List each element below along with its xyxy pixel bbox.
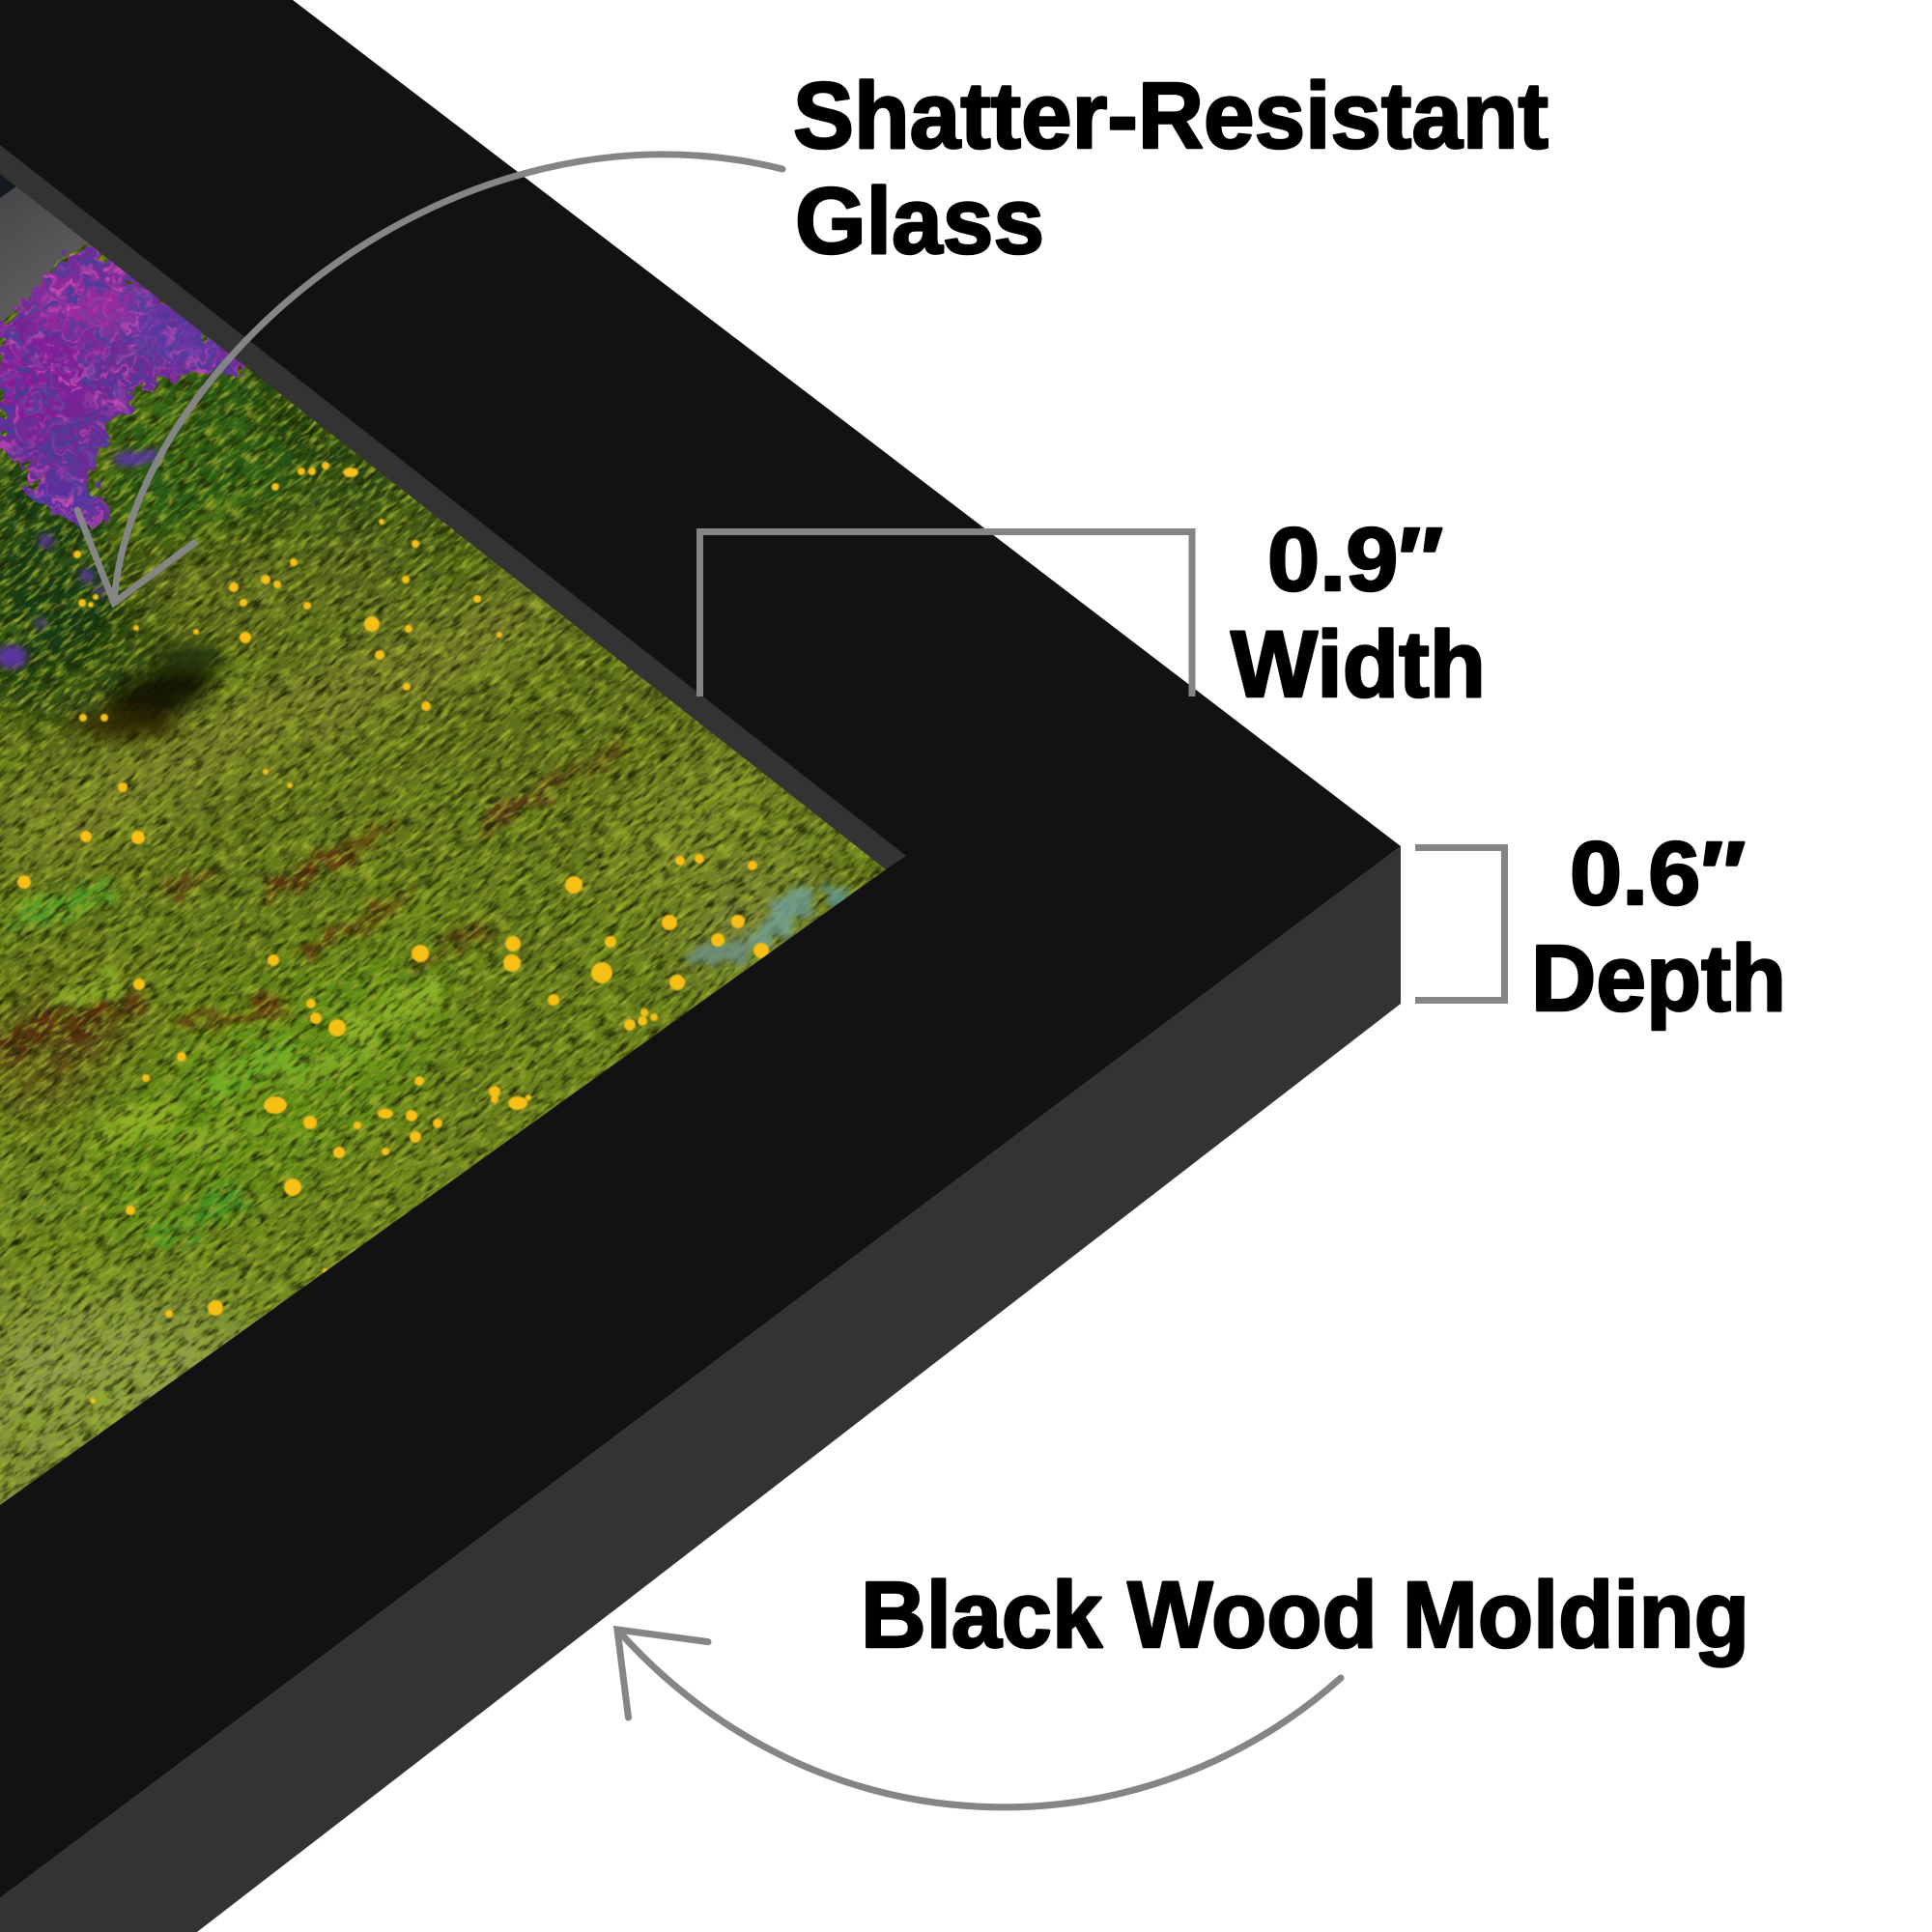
photo: grass texture dark xyxy=(0,244,883,1505)
photo: broad tonal patches xyxy=(0,396,842,1439)
label: Shatter-Resistant Glass: Glass xyxy=(795,168,1044,273)
photo: dark top-left corner xyxy=(0,174,15,198)
label: 0.9 inch width xyxy=(1231,509,1486,717)
photo: reddish brown and bright green streaks xyxy=(0,752,616,1236)
photo: mottled grass tone xyxy=(0,253,871,1475)
photo: grass texture light xyxy=(0,176,886,1505)
photo: grass base xyxy=(0,145,918,1517)
arrow: curved pointer to glass xyxy=(77,155,782,603)
photo: purple lupin flowers xyxy=(0,243,245,528)
label: 0.6 inch depth: 0.6″ xyxy=(1570,823,1746,923)
label: Black Wood Molding: Black Wood Molding xyxy=(861,1562,1749,1667)
label: 0.6 inch depth xyxy=(1531,823,1786,1031)
framed landscape photo xyxy=(0,0,918,1553)
photo: yellow wildflowers xyxy=(17,462,769,1404)
label: Shatter-Resistant Glass xyxy=(793,63,1548,273)
label: 0.9 inch width: Width xyxy=(1231,611,1486,717)
inner glass bevel strip xyxy=(0,145,906,869)
photo: blue green foliage by corner xyxy=(695,880,849,971)
frame top molding face xyxy=(0,0,1401,1898)
label: Shatter-Resistant Glass: Shatter-Resistant xyxy=(793,63,1548,168)
frame side depth face xyxy=(0,846,1401,1932)
label: 0.9 inch width: 0.9″ xyxy=(1267,509,1443,610)
photo: dark bushes under lupins xyxy=(0,368,362,667)
photo: grey wall xyxy=(0,185,92,324)
label: 0.6 inch depth: Depth xyxy=(1531,925,1786,1031)
bracket: frame depth xyxy=(1415,848,1505,1001)
bracket: frame width xyxy=(699,531,1192,696)
arrow: curved pointer to molding xyxy=(617,1630,1341,1807)
photo: dark hollow in grass xyxy=(72,643,225,738)
photo: small purple blossoms xyxy=(0,450,159,668)
